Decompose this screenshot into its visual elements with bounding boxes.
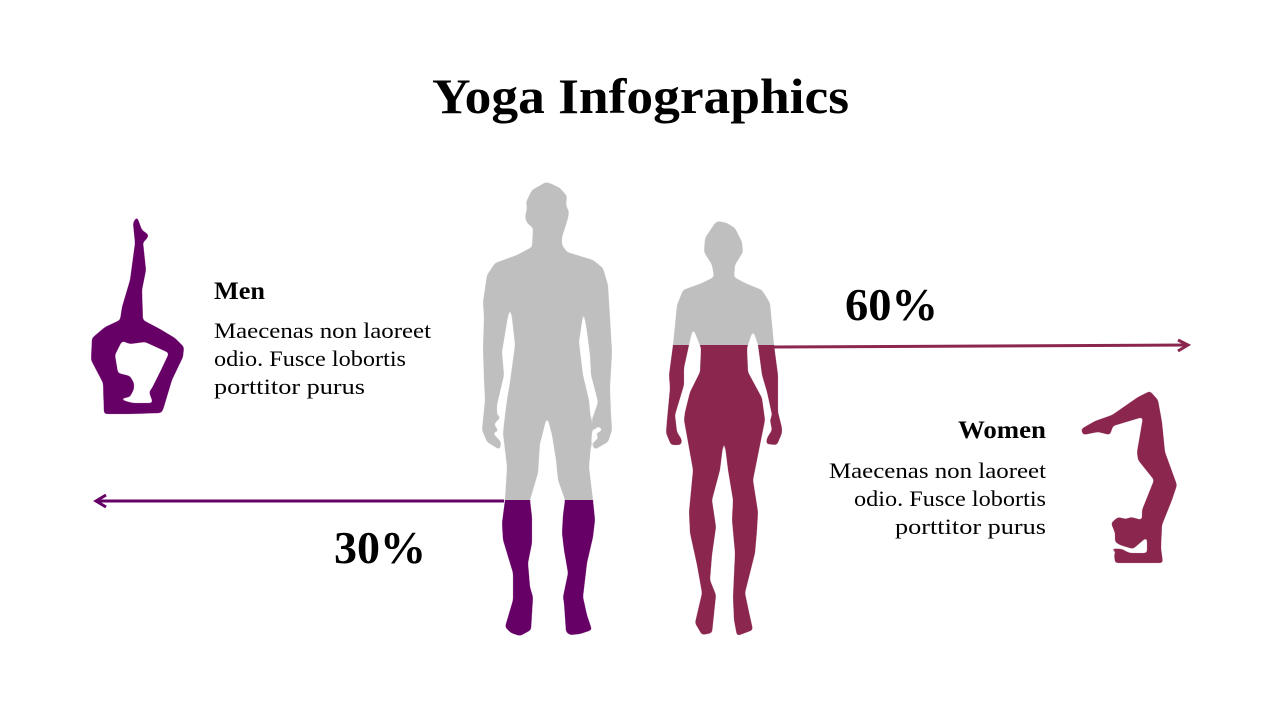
heading: men: Men (214, 278, 265, 305)
description: men (214, 318, 431, 399)
description: women: Maecenas non laoreet (829, 458, 1046, 483)
icon: maroon yoga pose (1081, 391, 1177, 563)
title: Yoga Infographics (432, 68, 849, 124)
description: men: Maecenas non laoreet (214, 318, 431, 343)
text block: men (214, 278, 431, 399)
description: women: odio. Fusce lobortis (854, 486, 1046, 511)
value: 60%: 60% (845, 279, 938, 330)
heading: women: Women (958, 417, 1046, 444)
description: women: porttitor purus (895, 514, 1046, 539)
icon: purple yoga pose (91, 216, 184, 414)
arrow: women 60% (774, 340, 1188, 351)
figure: woman 60% filled (666, 221, 782, 636)
arrow: men 30% (96, 495, 504, 507)
description: women (829, 458, 1046, 539)
value: 30%: 30% (334, 522, 426, 573)
description: men: porttitor purus (214, 374, 365, 399)
text block: women (829, 417, 1046, 539)
figure: man 30% filled (482, 182, 612, 636)
description: men: odio. Fusce lobortis (214, 346, 406, 371)
